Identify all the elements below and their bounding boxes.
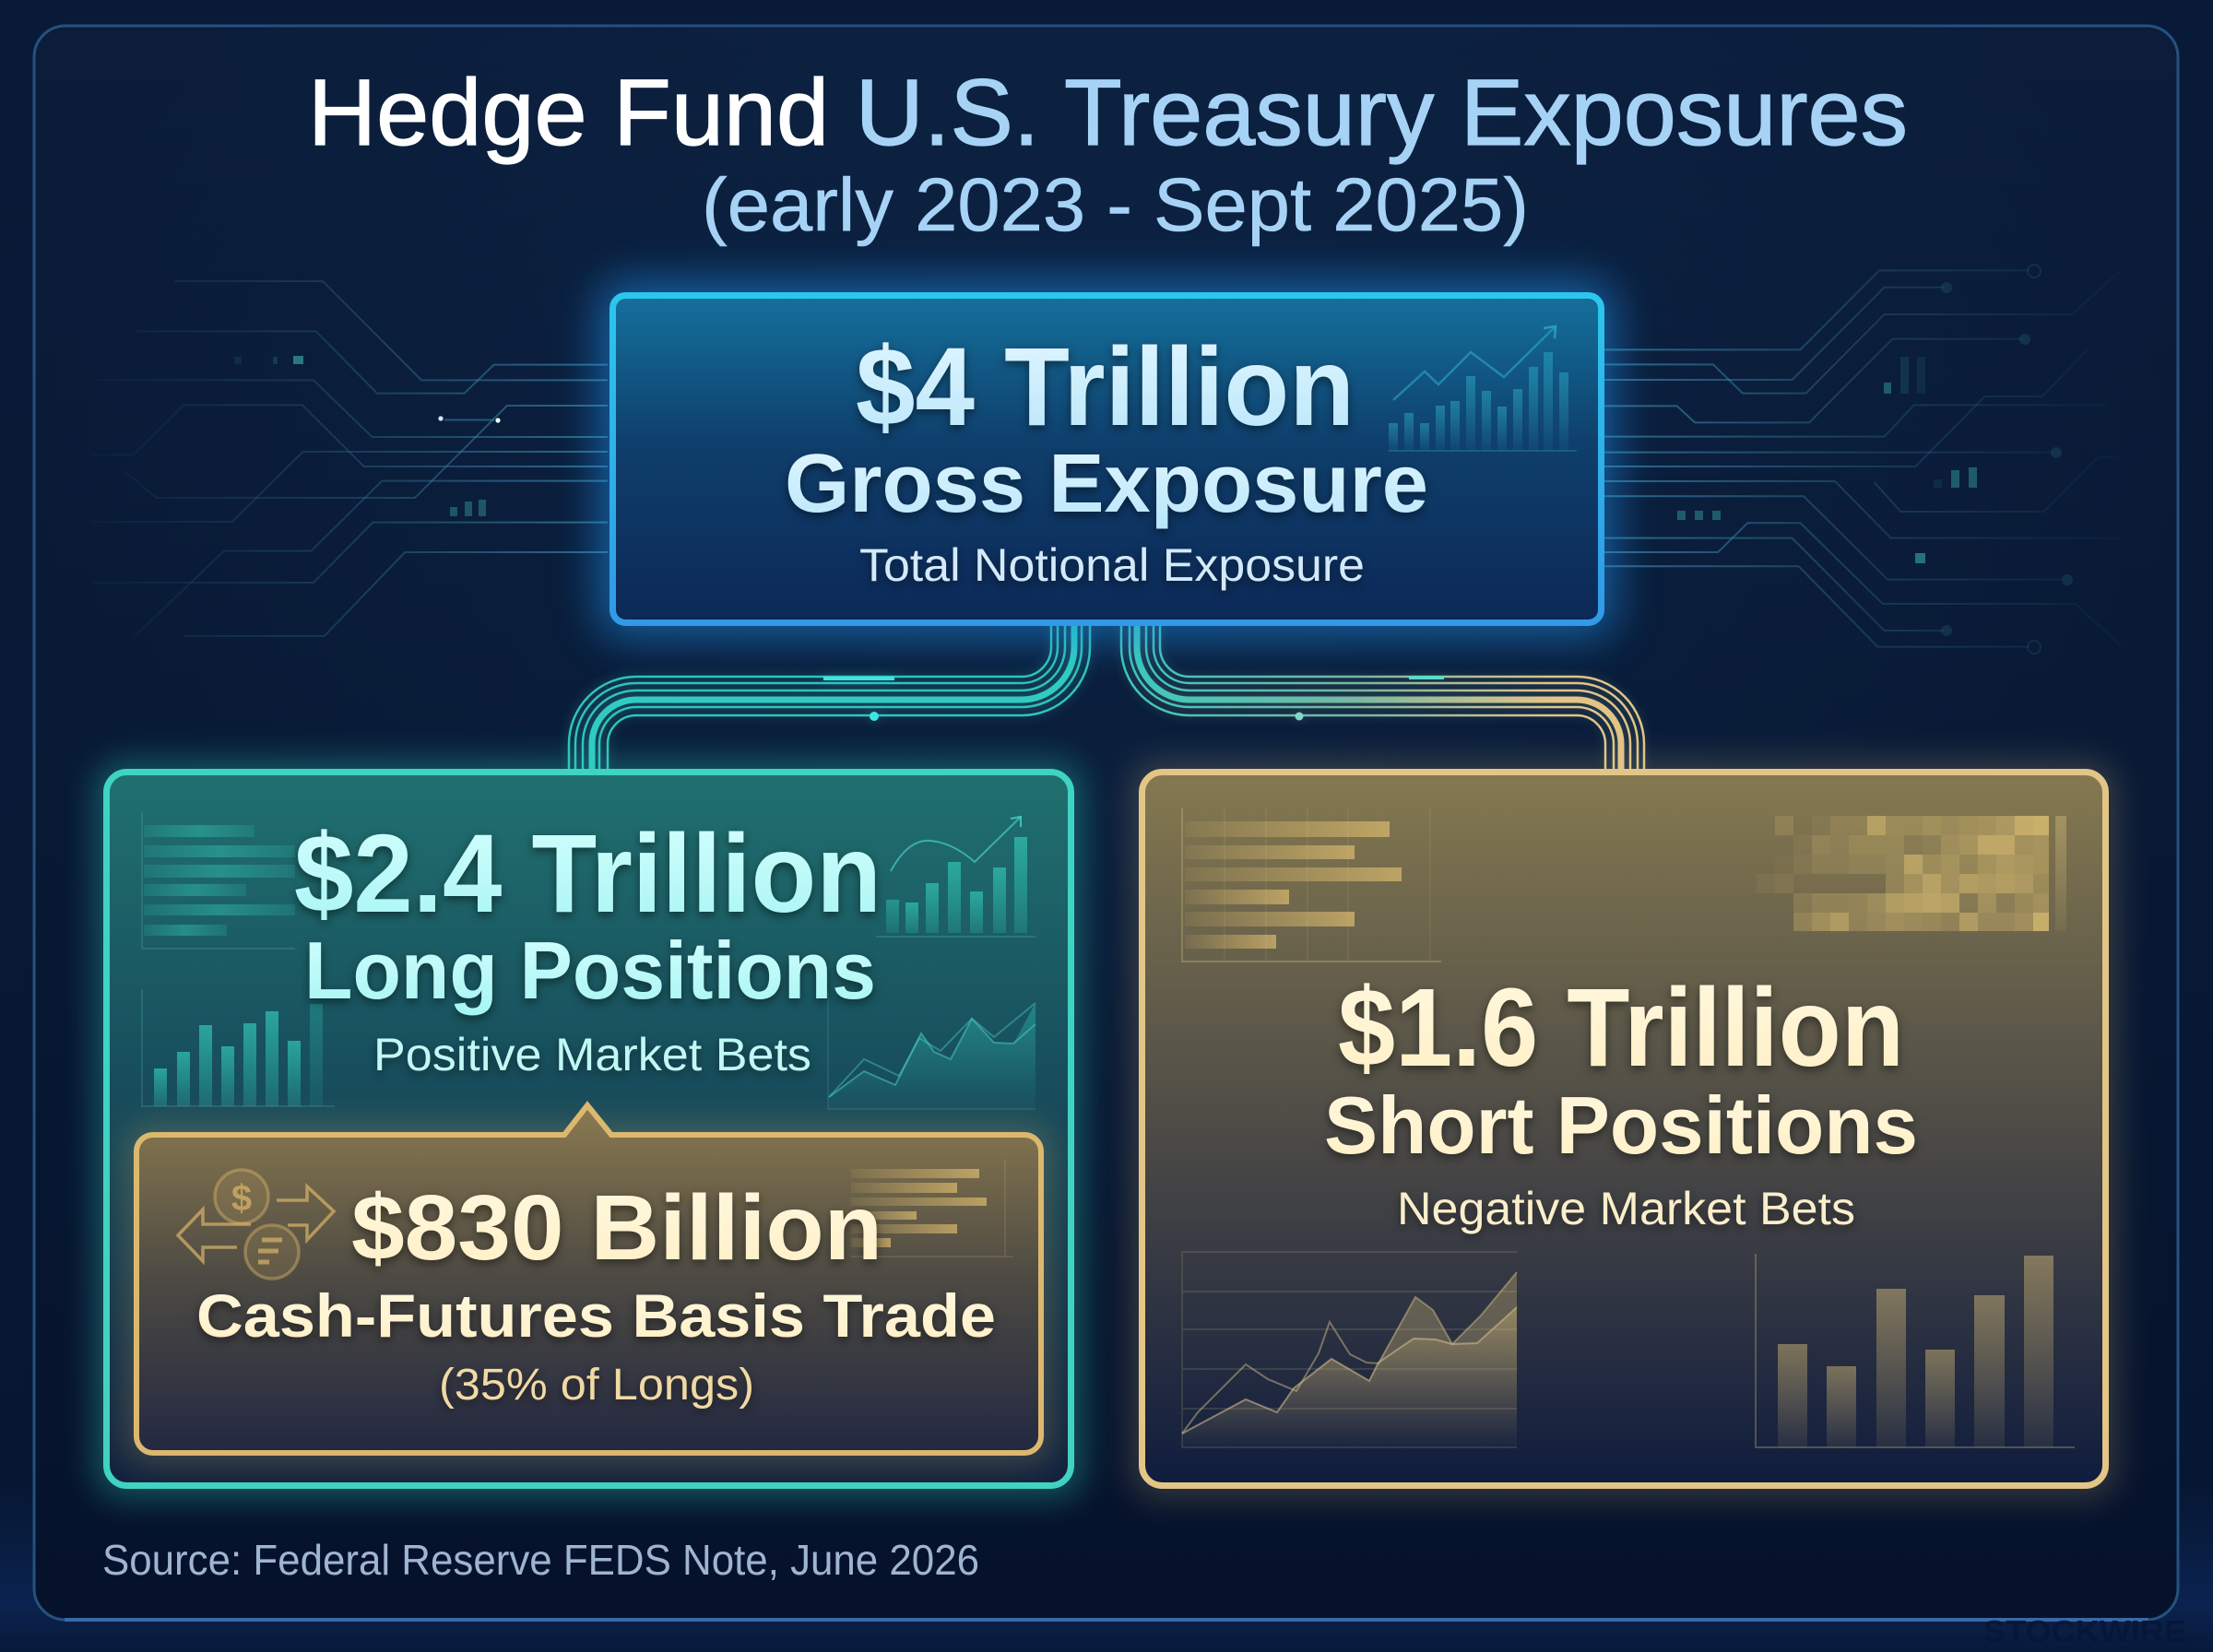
title <box>308 60 1908 247</box>
title: Hedge Fund U.S. Treasury Exposures <box>308 60 1908 165</box>
icon: coins and exchange arrows <box>178 1170 334 1279</box>
circuit decoration: right <box>1604 265 2121 654</box>
chart: vertical bars <box>1756 1254 2075 1447</box>
gross exposure description: Total Notional Exposure <box>859 539 1365 591</box>
panel: long positions <box>96 761 1083 1497</box>
callout: basis trade <box>125 1105 1051 1464</box>
basis trade value: $830 Billion <box>351 1176 882 1280</box>
long positions description: Positive Market Bets <box>373 1029 811 1080</box>
watermark: STOCKWIRE <box>1983 1614 2186 1648</box>
chart: area lines <box>828 991 1035 1109</box>
short positions value: $1.6 Trillion <box>1338 964 1904 1090</box>
chart: gold horizontal bars <box>851 1160 1013 1257</box>
icon: coins and exchange arrows: $ <box>231 1178 252 1219</box>
basis trade description: (35% of Longs) <box>439 1361 754 1410</box>
chart: horizontal bars <box>142 812 295 949</box>
mini chart: rising bars <box>1389 326 1577 451</box>
gross exposure value: $4 Trillion <box>856 324 1355 449</box>
long positions heading: Long Positions <box>304 925 876 1016</box>
basis trade heading: Cash-Futures Basis Trade <box>196 1281 996 1350</box>
chart: area lines <box>1182 1252 1517 1447</box>
short positions heading: Short Positions <box>1324 1080 1918 1171</box>
connector: gross exposure to short positions <box>1121 626 1644 769</box>
chart: heatmap <box>1757 816 2066 931</box>
source note: Source: Federal Reserve FEDS Note, June 2026 <box>102 1536 979 1584</box>
panel: gross exposure <box>599 282 1614 636</box>
chart: horizontal bars <box>1182 808 1441 962</box>
long positions value: $2.4 Trillion <box>294 810 882 936</box>
chart: vertical bars <box>142 989 335 1106</box>
circuit decoration: left <box>92 281 608 636</box>
connector: gross exposure to long positions <box>569 626 1090 769</box>
title: (early 2023 - Sept 2025) <box>702 163 1529 247</box>
panel: short positions <box>1131 761 2116 1497</box>
gross exposure heading: Gross Exposure <box>785 438 1428 530</box>
chart: bars with trend line <box>876 817 1035 937</box>
short positions description: Negative Market Bets <box>1397 1183 1855 1234</box>
